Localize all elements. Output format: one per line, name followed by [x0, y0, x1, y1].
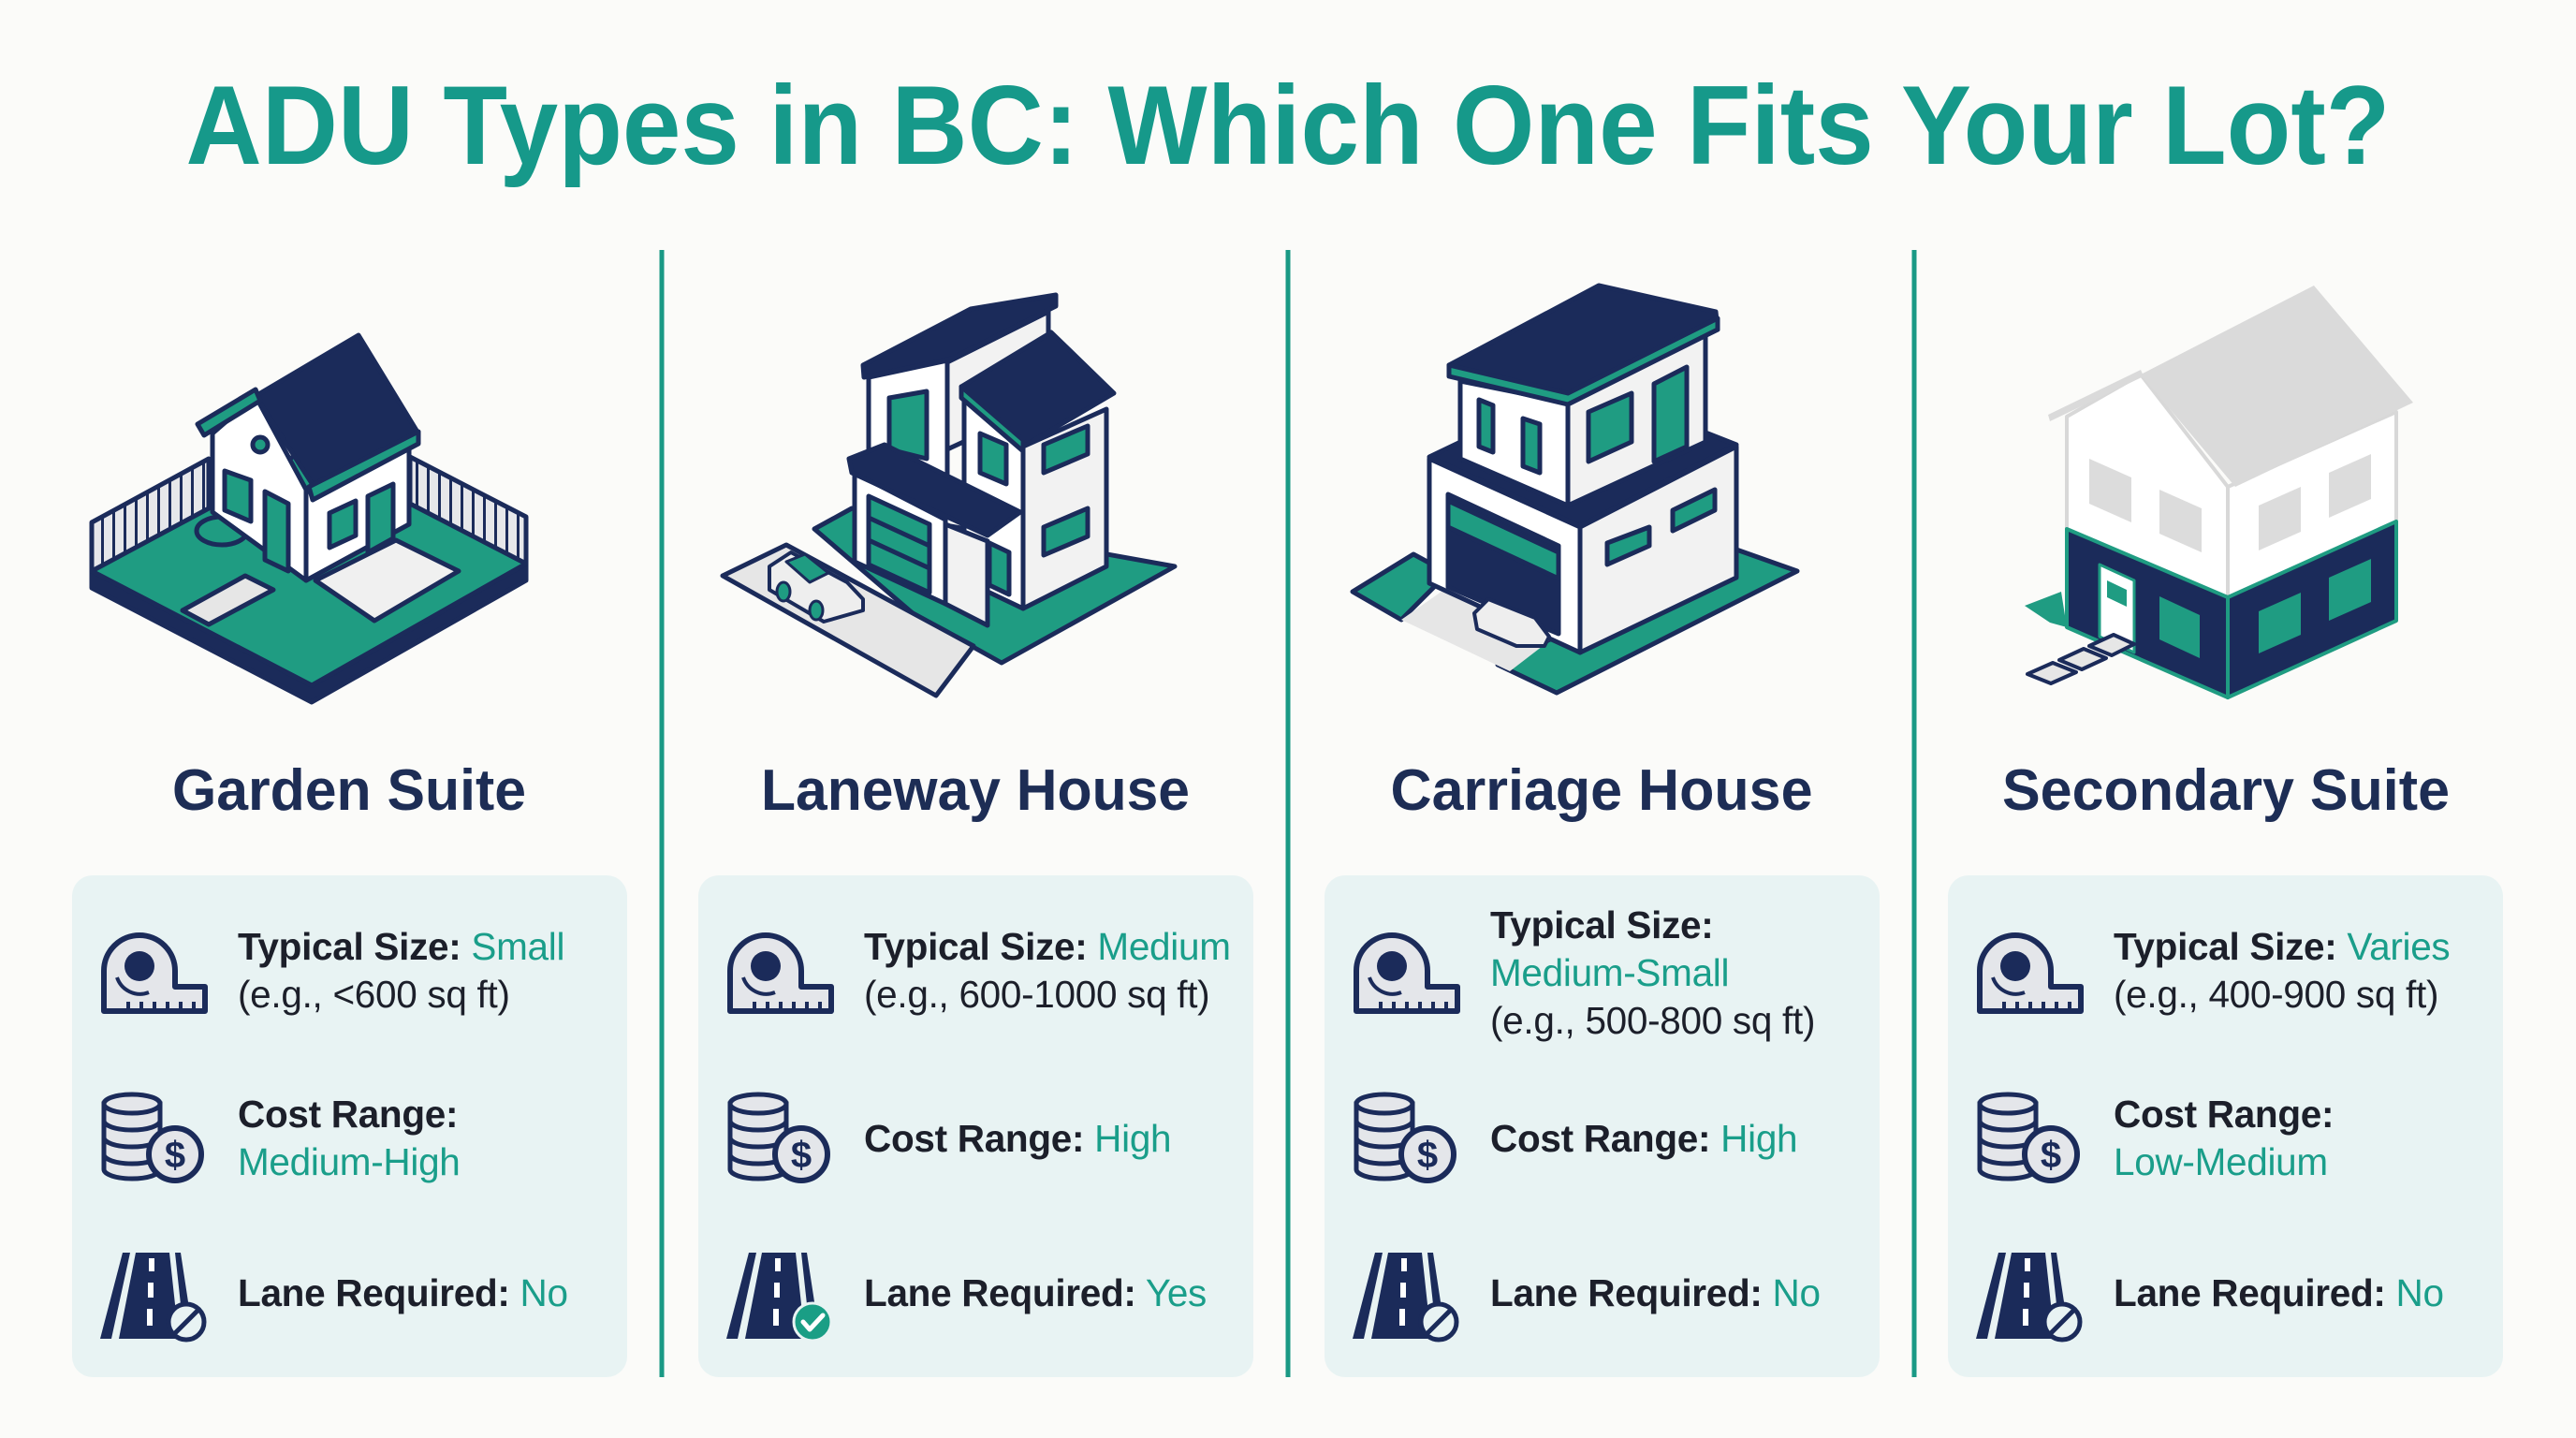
text: typical size: (e.g., 400-900 sq ft) [2114, 973, 2438, 1016]
icon: coins: $ [791, 1135, 812, 1176]
text: lane required: Lane Required: No [238, 1271, 568, 1314]
text: typical size: Typical Size: [1490, 903, 1713, 946]
text: lane required: Lane Required: Yes [864, 1271, 1207, 1314]
text: cost range: Low-Medium [2114, 1140, 2328, 1183]
text: typical size: Medium-Small [1490, 951, 1729, 994]
icon: road no lane [1976, 1253, 2082, 1343]
text: typical size: Typical Size: Medium [864, 925, 1231, 968]
text: typical size [238, 925, 564, 1016]
text: lane required: Lane Required: No [2114, 1271, 2444, 1314]
text: cost range: Cost Range: High [864, 1117, 1171, 1160]
heading: carriage house: Carriage House [1391, 758, 1812, 823]
icon: tape measure [1977, 932, 2084, 1014]
main illustration layer [90, 63, 2450, 871]
card: carriage house [1325, 875, 1880, 1377]
illustration: carriage house [1353, 286, 1797, 693]
text: cost range: Cost Range: High [1490, 1117, 1797, 1160]
icon: road no lane [100, 1253, 206, 1343]
text: typical size [2114, 925, 2450, 1016]
illustration: secondary suite [2025, 286, 2413, 697]
text: typical size: (e.g., 600-1000 sq ft) [864, 973, 1209, 1016]
icon: coins: $ [165, 1135, 185, 1176]
title: ADU Types in BC: Which One Fits Your Lot? [185, 63, 2391, 188]
text: typical size [864, 925, 1231, 1016]
text: typical size: (e.g., 500-800 sq ft) [1490, 999, 1815, 1042]
text: cost range [238, 1093, 461, 1183]
heading: garden suite: Garden Suite [172, 758, 526, 823]
card: laneway house [698, 875, 1253, 1377]
icon: tape measure [1354, 932, 1460, 1014]
icon: tape measure [727, 932, 834, 1014]
text: typical size: (e.g., <600 sq ft) [238, 973, 510, 1016]
icon: coins: $ [2041, 1135, 2061, 1176]
icon: coins [1977, 1092, 2080, 1183]
card: secondary suite [1948, 875, 2503, 1377]
icon: tape measure [101, 932, 208, 1014]
text: cost range: Medium-High [238, 1140, 461, 1183]
card: garden suite [72, 875, 627, 1377]
dividers lower part [659, 871, 1917, 1377]
text: typical size [1490, 903, 1815, 1042]
icon: road with check [726, 1253, 829, 1339]
heading: secondary suite: Secondary Suite [2002, 758, 2450, 823]
illustration: garden suite [92, 335, 526, 702]
icon: road no lane [1353, 1253, 1458, 1343]
text: cost range: Cost Range: [2114, 1093, 2334, 1136]
text: typical size: Typical Size: Small [238, 925, 564, 968]
illustration: laneway house [723, 295, 1175, 696]
text: lane required: Lane Required: No [1490, 1271, 1821, 1314]
text: cost range: Cost Range: [238, 1093, 458, 1136]
text: typical size: Typical Size: Varies [2114, 925, 2450, 968]
icon: coins [728, 1092, 830, 1183]
icon: coins: $ [1417, 1135, 1438, 1176]
heading: laneway house: Laneway House [761, 758, 1190, 823]
text: cost range [2114, 1093, 2334, 1183]
icon: coins [1354, 1092, 1456, 1183]
icon: coins [101, 1092, 204, 1183]
